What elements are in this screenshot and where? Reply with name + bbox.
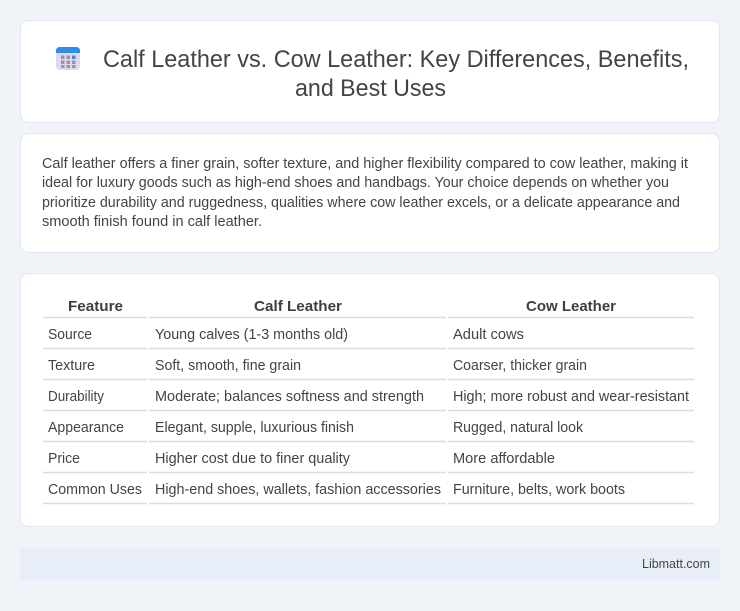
row: appearance: Rugged, natural look xyxy=(453,420,584,436)
panel: header xyxy=(20,20,720,122)
table header xyxy=(68,298,616,315)
row: source: Source xyxy=(48,327,92,343)
row: price xyxy=(48,451,555,467)
footer: Libmatt.com xyxy=(642,556,710,571)
table header: Calf Leather xyxy=(254,298,342,315)
row: source: Adult cows xyxy=(453,327,524,343)
panel: introduction text: ideal for luxury goods such as high-end shoes and handbags. Your choice depends on whether you xyxy=(42,175,669,191)
table header: Feature xyxy=(68,298,123,315)
icon: calendar xyxy=(56,47,80,70)
row: source: Young calves (1-3 months old) xyxy=(155,327,348,343)
panel: introduction text: prioritize durability and ruggedness, qualities where cow leather excels, or a delicate appearance and xyxy=(42,195,680,211)
row: price: More affordable xyxy=(453,451,555,467)
row: appearance: Elegant, supple, luxurious finish xyxy=(155,420,354,436)
row: common uses xyxy=(48,482,625,498)
row: texture: Coarser, thicker grain xyxy=(453,358,587,374)
row: appearance: Appearance xyxy=(48,420,124,436)
row: common uses: High-end shoes, wallets, fashion accessories xyxy=(155,482,441,498)
row: texture: Texture xyxy=(48,358,95,374)
row: price: Higher cost due to finer quality xyxy=(155,451,351,467)
row: durability xyxy=(48,389,689,405)
panel: introduction text: Calf leather offers a finer grain, softer texture, and higher flexibility compared to cow leather, making it xyxy=(42,156,688,172)
title: Calf Leather vs. Cow Leather: Key Differences, Benefits, xyxy=(103,46,689,73)
row: common uses: Common Uses xyxy=(48,482,142,498)
row: appearance xyxy=(48,420,584,436)
row: durability: Durability xyxy=(48,389,105,405)
footer xyxy=(20,547,720,581)
row: texture: Soft, smooth, fine grain xyxy=(155,358,301,374)
row: durability: High; more robust and wear-resistant xyxy=(453,389,689,405)
title xyxy=(103,46,689,102)
row: texture xyxy=(48,358,587,374)
row: common uses: Furniture, belts, work boots xyxy=(453,482,625,498)
panel: introduction text: smooth finish found in calf leather. xyxy=(42,214,262,230)
row: price: Price xyxy=(48,451,80,467)
title: and Best Uses xyxy=(295,75,446,102)
row: durability: Moderate; balances softness and strength xyxy=(155,389,424,405)
panel: introduction text xyxy=(20,134,720,252)
table header: Cow Leather xyxy=(526,298,616,315)
panel: comparison table xyxy=(20,274,720,526)
row: source xyxy=(48,327,524,343)
